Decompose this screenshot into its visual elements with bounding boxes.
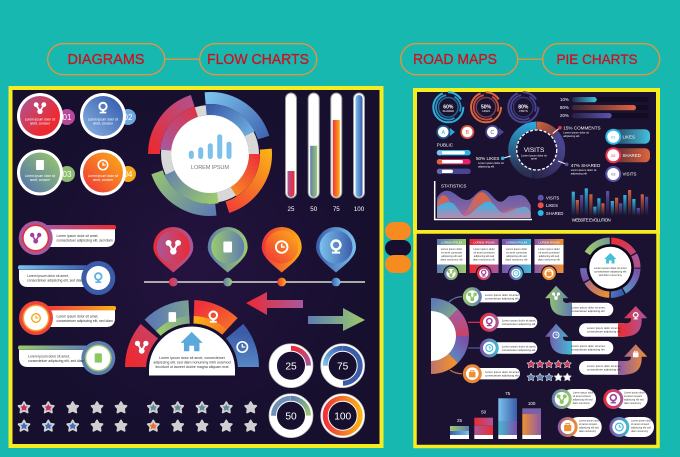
callout: 15% comments: adipiscing elit bbox=[563, 134, 580, 138]
node: network: consectetuer adipiscing elit bbox=[485, 296, 519, 300]
heading: diagrams pill: DIAGRAMS bbox=[68, 51, 144, 68]
info card 2 bbox=[470, 239, 498, 281]
icon pill: webcam: Lorem ipsum dolor bbox=[624, 392, 645, 394]
star rating group 1 bbox=[18, 402, 126, 431]
icon pill: bag: diam nonummy bbox=[579, 430, 597, 433]
area chart legend: VISITS bbox=[546, 196, 559, 200]
semicircle hub bbox=[386, 291, 476, 381]
website evolution bar chart: WEBSITE EVOLUTION bbox=[572, 218, 611, 222]
gauge text: Lorem ipsum dolor sit amet, consectetuer bbox=[159, 356, 226, 360]
progress ring 100 bbox=[321, 394, 365, 438]
progress bars: 20% bbox=[560, 113, 569, 118]
label banner: clock: consectetuer adipiscing elit, sed diam bbox=[56, 319, 113, 323]
arrow label: network: Lorem ipsum dolor sit amet, bbox=[571, 306, 606, 310]
heading: diagrams pill bbox=[48, 44, 165, 75]
callout: 15% comments: Lorem ipsum dolor sit bbox=[563, 130, 589, 134]
stat pill: shared: 02 bbox=[611, 153, 616, 158]
label banner: network: Lorem ipsum dolor sit amet, bbox=[56, 234, 98, 238]
area chart legend: SHARED bbox=[546, 211, 563, 216]
progress ring 75: 75 bbox=[337, 362, 349, 372]
arrow label: network: consectetuer adipiscing elit bbox=[571, 309, 605, 313]
radial stat 50%: 50% bbox=[481, 104, 492, 110]
radial stat 80%: 80% bbox=[518, 104, 529, 110]
heading: pie charts pill bbox=[543, 44, 660, 75]
label banner: webcam: Lorem ipsum dolor sit amet, bbox=[27, 274, 69, 278]
icon pill: webcam bbox=[603, 389, 648, 409]
stat pill: visits bbox=[605, 166, 636, 182]
callout: 47% shared: 47% SHARED bbox=[571, 163, 601, 168]
gauge text bbox=[153, 356, 231, 369]
progress ring 25 bbox=[269, 344, 313, 388]
node: bag: consectetuer adipiscing elit bbox=[485, 374, 519, 378]
pin: book bbox=[208, 227, 248, 286]
icon pill: clock: sit amet consect bbox=[631, 423, 649, 426]
map pins timeline bbox=[144, 227, 365, 286]
stat pill: shared: SHARED bbox=[622, 153, 641, 158]
column 50: 50 bbox=[481, 410, 487, 414]
numbered circle 02: amet, conseer bbox=[93, 122, 114, 126]
callout: 47% shared: adipiscing elit bbox=[571, 172, 587, 176]
column chart bbox=[450, 391, 541, 439]
numbered circle 03: amet, conseer bbox=[30, 178, 51, 182]
info card 2: diam nonummy nib bbox=[473, 258, 496, 262]
info card 2: adipiscing elit sed bbox=[474, 254, 495, 258]
tube 75: 75 bbox=[333, 206, 340, 213]
arrow label: clock bbox=[545, 324, 613, 354]
info card 1: diam nonummy nib bbox=[441, 258, 463, 262]
node: clock: Lorem ipsum dolor sit amet, bbox=[502, 344, 536, 348]
callout: 50% likes: 50% LIKES bbox=[476, 156, 500, 161]
radial stat 60% bbox=[431, 90, 465, 124]
arrow label: webcam: Lorem ipsum dolor sit amet, bbox=[587, 326, 622, 330]
info card 2: sit amet consectet bbox=[474, 250, 495, 254]
visits donut chart bbox=[502, 115, 571, 185]
icon pill: bag: sit amet consect bbox=[579, 423, 597, 426]
label banner: webcam: consectetuer adipiscing elit, sed diam bbox=[27, 278, 84, 282]
icon pill: network: sit amet consect bbox=[573, 395, 591, 398]
tube 100: 100 bbox=[354, 206, 365, 213]
stat pill: visits: 03 bbox=[611, 172, 616, 177]
hub ring with house: Lorem ipsum dolor sit amet bbox=[594, 266, 627, 270]
icon pill: webcam: adipiscing elit sed bbox=[624, 398, 644, 402]
icon pill: clock: Lorem ipsum dolor bbox=[631, 420, 652, 422]
info card 2: Lorem ipsum dolor bbox=[473, 247, 495, 251]
node: webcam: consectetuer adipiscing elit bbox=[502, 322, 536, 326]
numbered circle 01: Lorem ipsum dolor sit bbox=[25, 118, 55, 122]
radial stat 80%: VISITS bbox=[519, 109, 528, 113]
numbered circle 04 bbox=[80, 150, 136, 196]
arrow label: webcam: consectetuer adipiscing elit bbox=[587, 330, 621, 334]
info card 2: LOREM IPSUM bbox=[473, 240, 495, 244]
arrow: right green bbox=[308, 308, 365, 331]
node: webcam bbox=[480, 313, 537, 332]
visits donut chart: Lorem ipsum dolor sit bbox=[521, 154, 547, 158]
label banner: clock bbox=[19, 301, 116, 335]
heading: road maps pill bbox=[401, 44, 518, 75]
stat pill: likes: LIKES bbox=[622, 134, 635, 140]
label banner: network bbox=[19, 221, 116, 255]
stat pill: shared bbox=[605, 147, 650, 163]
panel: bottom right pie charts bbox=[386, 230, 658, 446]
connector: panel joint bbox=[385, 222, 411, 273]
callout: 50% likes: Lorem ipsum dolor sit bbox=[478, 161, 504, 165]
arrow label: clock: Lorem ipsum dolor sit amet, bbox=[571, 344, 606, 348]
icon pill: network bbox=[552, 389, 596, 409]
label banner: network: consectetuer adipiscing elit, sed diam bbox=[56, 238, 113, 242]
thermometer bars bbox=[286, 93, 365, 213]
statistics area chart bbox=[435, 181, 532, 220]
info card 4: diam nonummy nib bbox=[538, 258, 561, 262]
radial stat 50%: LIKES bbox=[482, 109, 490, 113]
info card 1 bbox=[437, 239, 466, 281]
icon pill: clock: adipiscing elit sed bbox=[631, 426, 651, 430]
semicircular gauge bbox=[114, 289, 270, 445]
progress bars: 80% bbox=[560, 105, 569, 110]
column 75: 75 bbox=[505, 391, 511, 396]
node: bag bbox=[463, 364, 520, 383]
node: webcam: Lorem ipsum dolor sit amet, bbox=[502, 319, 536, 323]
radial stat 60%: SHARED bbox=[442, 109, 454, 113]
info card 3 bbox=[502, 239, 531, 281]
node: clock: consectetuer adipiscing elit bbox=[502, 348, 536, 352]
marker B: B bbox=[466, 130, 470, 136]
segmented donut chart bbox=[148, 92, 272, 216]
label banner: clock: Lorem ipsum dolor sit amet, bbox=[56, 314, 98, 318]
icon: house bbox=[181, 332, 203, 351]
area chart legend: LIKES bbox=[546, 203, 558, 208]
numbered circle 04: amet, conseer bbox=[93, 178, 114, 182]
icon: house bbox=[604, 253, 616, 264]
info card 1: LOREM IPSUM bbox=[441, 240, 462, 244]
info card 4: LOREM IPSUM bbox=[538, 240, 560, 244]
arrow label: clock: consectetuer adipiscing elit bbox=[571, 348, 605, 352]
numbered circle 01: 01 bbox=[63, 113, 72, 122]
gauge icons bbox=[135, 311, 247, 354]
info card 1: sit amet consectet bbox=[441, 250, 462, 254]
progress bars bbox=[560, 97, 648, 118]
callout: 50% likes bbox=[476, 156, 511, 168]
panel: top right road maps bbox=[415, 90, 658, 232]
segmented donut chart: LOREM IPSUM bbox=[191, 165, 229, 171]
info card 3: Lorem ipsum dolor bbox=[506, 247, 527, 251]
callout: 47% shared bbox=[558, 161, 601, 176]
numbered circle 01 bbox=[17, 93, 75, 139]
arrow label: bag bbox=[579, 344, 647, 375]
callout: 47% shared: Lorem ipsum dolor sit bbox=[571, 168, 597, 172]
numbered circle 03 bbox=[17, 150, 75, 196]
info card 3: sit amet consectet bbox=[506, 250, 527, 254]
icon pill: clock: diam nonummy bbox=[631, 430, 649, 433]
radial stat 60%: 60% bbox=[443, 104, 454, 110]
pin: network bbox=[153, 227, 193, 286]
connector: road maps to pie charts bbox=[518, 58, 542, 60]
progress ring 25: 25 bbox=[285, 362, 297, 372]
hub ring with house: consectetuer adipiscing elit bbox=[594, 270, 627, 274]
arrow label: network bbox=[545, 286, 613, 316]
callout: 50% likes: adipiscing elit bbox=[478, 164, 494, 168]
info card 1: adipiscing elit sed bbox=[441, 254, 462, 258]
star rating group 2 bbox=[148, 402, 256, 431]
marker A: A bbox=[442, 130, 446, 136]
pin: clock bbox=[262, 227, 302, 286]
info card 4: adipiscing elit sed bbox=[539, 254, 560, 258]
progress bars: 10% bbox=[560, 97, 569, 102]
label banner: book: Lorem ipsum dolor sit amet, bbox=[28, 354, 70, 358]
info card 3: diam nonummy nib bbox=[506, 258, 528, 262]
icon pill: clock bbox=[609, 417, 654, 437]
public horizontal bars bbox=[437, 142, 471, 174]
icon pill: webcam: sit amet consect bbox=[624, 395, 642, 398]
progress ring 75 bbox=[321, 344, 365, 388]
icon pill: network: adipiscing elit sed bbox=[573, 398, 593, 402]
stat pill: likes bbox=[605, 129, 650, 145]
info card 3: adipiscing elit sed bbox=[506, 254, 527, 258]
visits donut chart: amet bbox=[531, 156, 537, 160]
icon pill: webcam: diam nonummy bbox=[624, 402, 642, 405]
icon pill: bag bbox=[558, 417, 602, 437]
heading: road maps pill: ROAD MAPS bbox=[413, 51, 497, 68]
tube 50: 50 bbox=[310, 206, 318, 213]
tube 25: 25 bbox=[288, 206, 295, 213]
callout: 15% comments bbox=[553, 126, 601, 138]
arrow label: webcam bbox=[579, 306, 647, 337]
callout: 15% comments: 15% COMMENTS bbox=[563, 126, 601, 130]
info card 1: Lorem ipsum dolor bbox=[441, 247, 462, 251]
stat pill: visits: VISITS bbox=[622, 172, 636, 177]
column 100: 100 bbox=[528, 401, 536, 406]
pin: webcam bbox=[316, 227, 356, 286]
gauge text: adipiscing elit, sed diam nonummy nibh euismod bbox=[153, 360, 231, 364]
arrow: left red bbox=[246, 292, 303, 315]
arrow label: bag: consectetuer adipiscing elit bbox=[587, 368, 621, 372]
label banner: webcam bbox=[18, 261, 115, 295]
node: network bbox=[463, 287, 520, 306]
info card 3: LOREM IPSUM bbox=[506, 240, 527, 244]
info card 4: Lorem ipsum dolor bbox=[538, 247, 560, 251]
statistics area chart: STATISTICS bbox=[441, 184, 466, 188]
icon pill: network: diam nonummy bbox=[573, 402, 591, 405]
heading: flow charts pill bbox=[200, 44, 317, 75]
hub ring with house: sed diam nonummy bbox=[599, 273, 623, 277]
markers A B C bbox=[436, 125, 504, 139]
icon: bar chart bbox=[189, 134, 232, 159]
area chart legend bbox=[538, 195, 563, 216]
connector: diagrams to flow charts bbox=[165, 58, 199, 60]
icon pill: network: Lorem ipsum dolor bbox=[573, 392, 594, 394]
info card 4: sit amet consectet bbox=[539, 250, 560, 254]
heading: pie charts pill: PIE CHARTS bbox=[556, 52, 638, 67]
website evolution bar chart bbox=[572, 188, 648, 222]
hub ring with house bbox=[573, 230, 648, 305]
progress ring 100: 100 bbox=[334, 412, 352, 422]
marker C: C bbox=[490, 130, 494, 136]
numbered circle 04: 04 bbox=[124, 170, 133, 179]
column 25: 25 bbox=[457, 418, 462, 423]
connector lines bbox=[448, 297, 482, 374]
progress ring 50 bbox=[269, 394, 313, 438]
arrow label: bag: Lorem ipsum dolor sit amet, bbox=[587, 364, 622, 368]
numbered circle 03: Lorem ipsum dolor sit bbox=[25, 174, 55, 178]
info card 4 bbox=[534, 239, 564, 281]
node: bag: Lorem ipsum dolor sit amet, bbox=[485, 370, 520, 374]
progress ring 50: 50 bbox=[285, 412, 297, 422]
stat pill: likes: 01 bbox=[611, 134, 616, 140]
numbered circle 01: amet, conseer bbox=[30, 122, 51, 126]
panel: left diagrams and flow charts bbox=[10, 88, 382, 446]
label banner: book: consectetuer adipiscing elit, sed diam bbox=[28, 359, 85, 363]
icon pill: bag: adipiscing elit sed bbox=[579, 426, 599, 430]
node: clock bbox=[480, 338, 537, 358]
gauge text: tincidunt ut laoreet dolore magna aliquam erat bbox=[155, 365, 229, 369]
radial stat 50% bbox=[469, 90, 503, 124]
radial stat 80% bbox=[506, 90, 540, 124]
node: network: Lorem ipsum dolor sit amet, bbox=[485, 293, 520, 297]
star rating group 3 bbox=[527, 360, 571, 381]
numbered circle 02: Lorem ipsum dolor sit bbox=[88, 118, 118, 122]
public horizontal bars: PUBLIC bbox=[437, 142, 454, 148]
visits donut chart: VISITS bbox=[524, 147, 545, 154]
label banner: book bbox=[18, 341, 115, 375]
numbered circle 02 bbox=[80, 93, 136, 139]
numbered circle 02: 02 bbox=[124, 113, 133, 122]
numbered circle 04: Lorem ipsum dolor sit bbox=[88, 174, 118, 178]
heading: flow charts pill: FLOW CHARTS bbox=[207, 51, 309, 68]
icon pill: bag: Lorem ipsum dolor bbox=[579, 420, 600, 422]
numbered circle 03: 03 bbox=[63, 170, 72, 179]
